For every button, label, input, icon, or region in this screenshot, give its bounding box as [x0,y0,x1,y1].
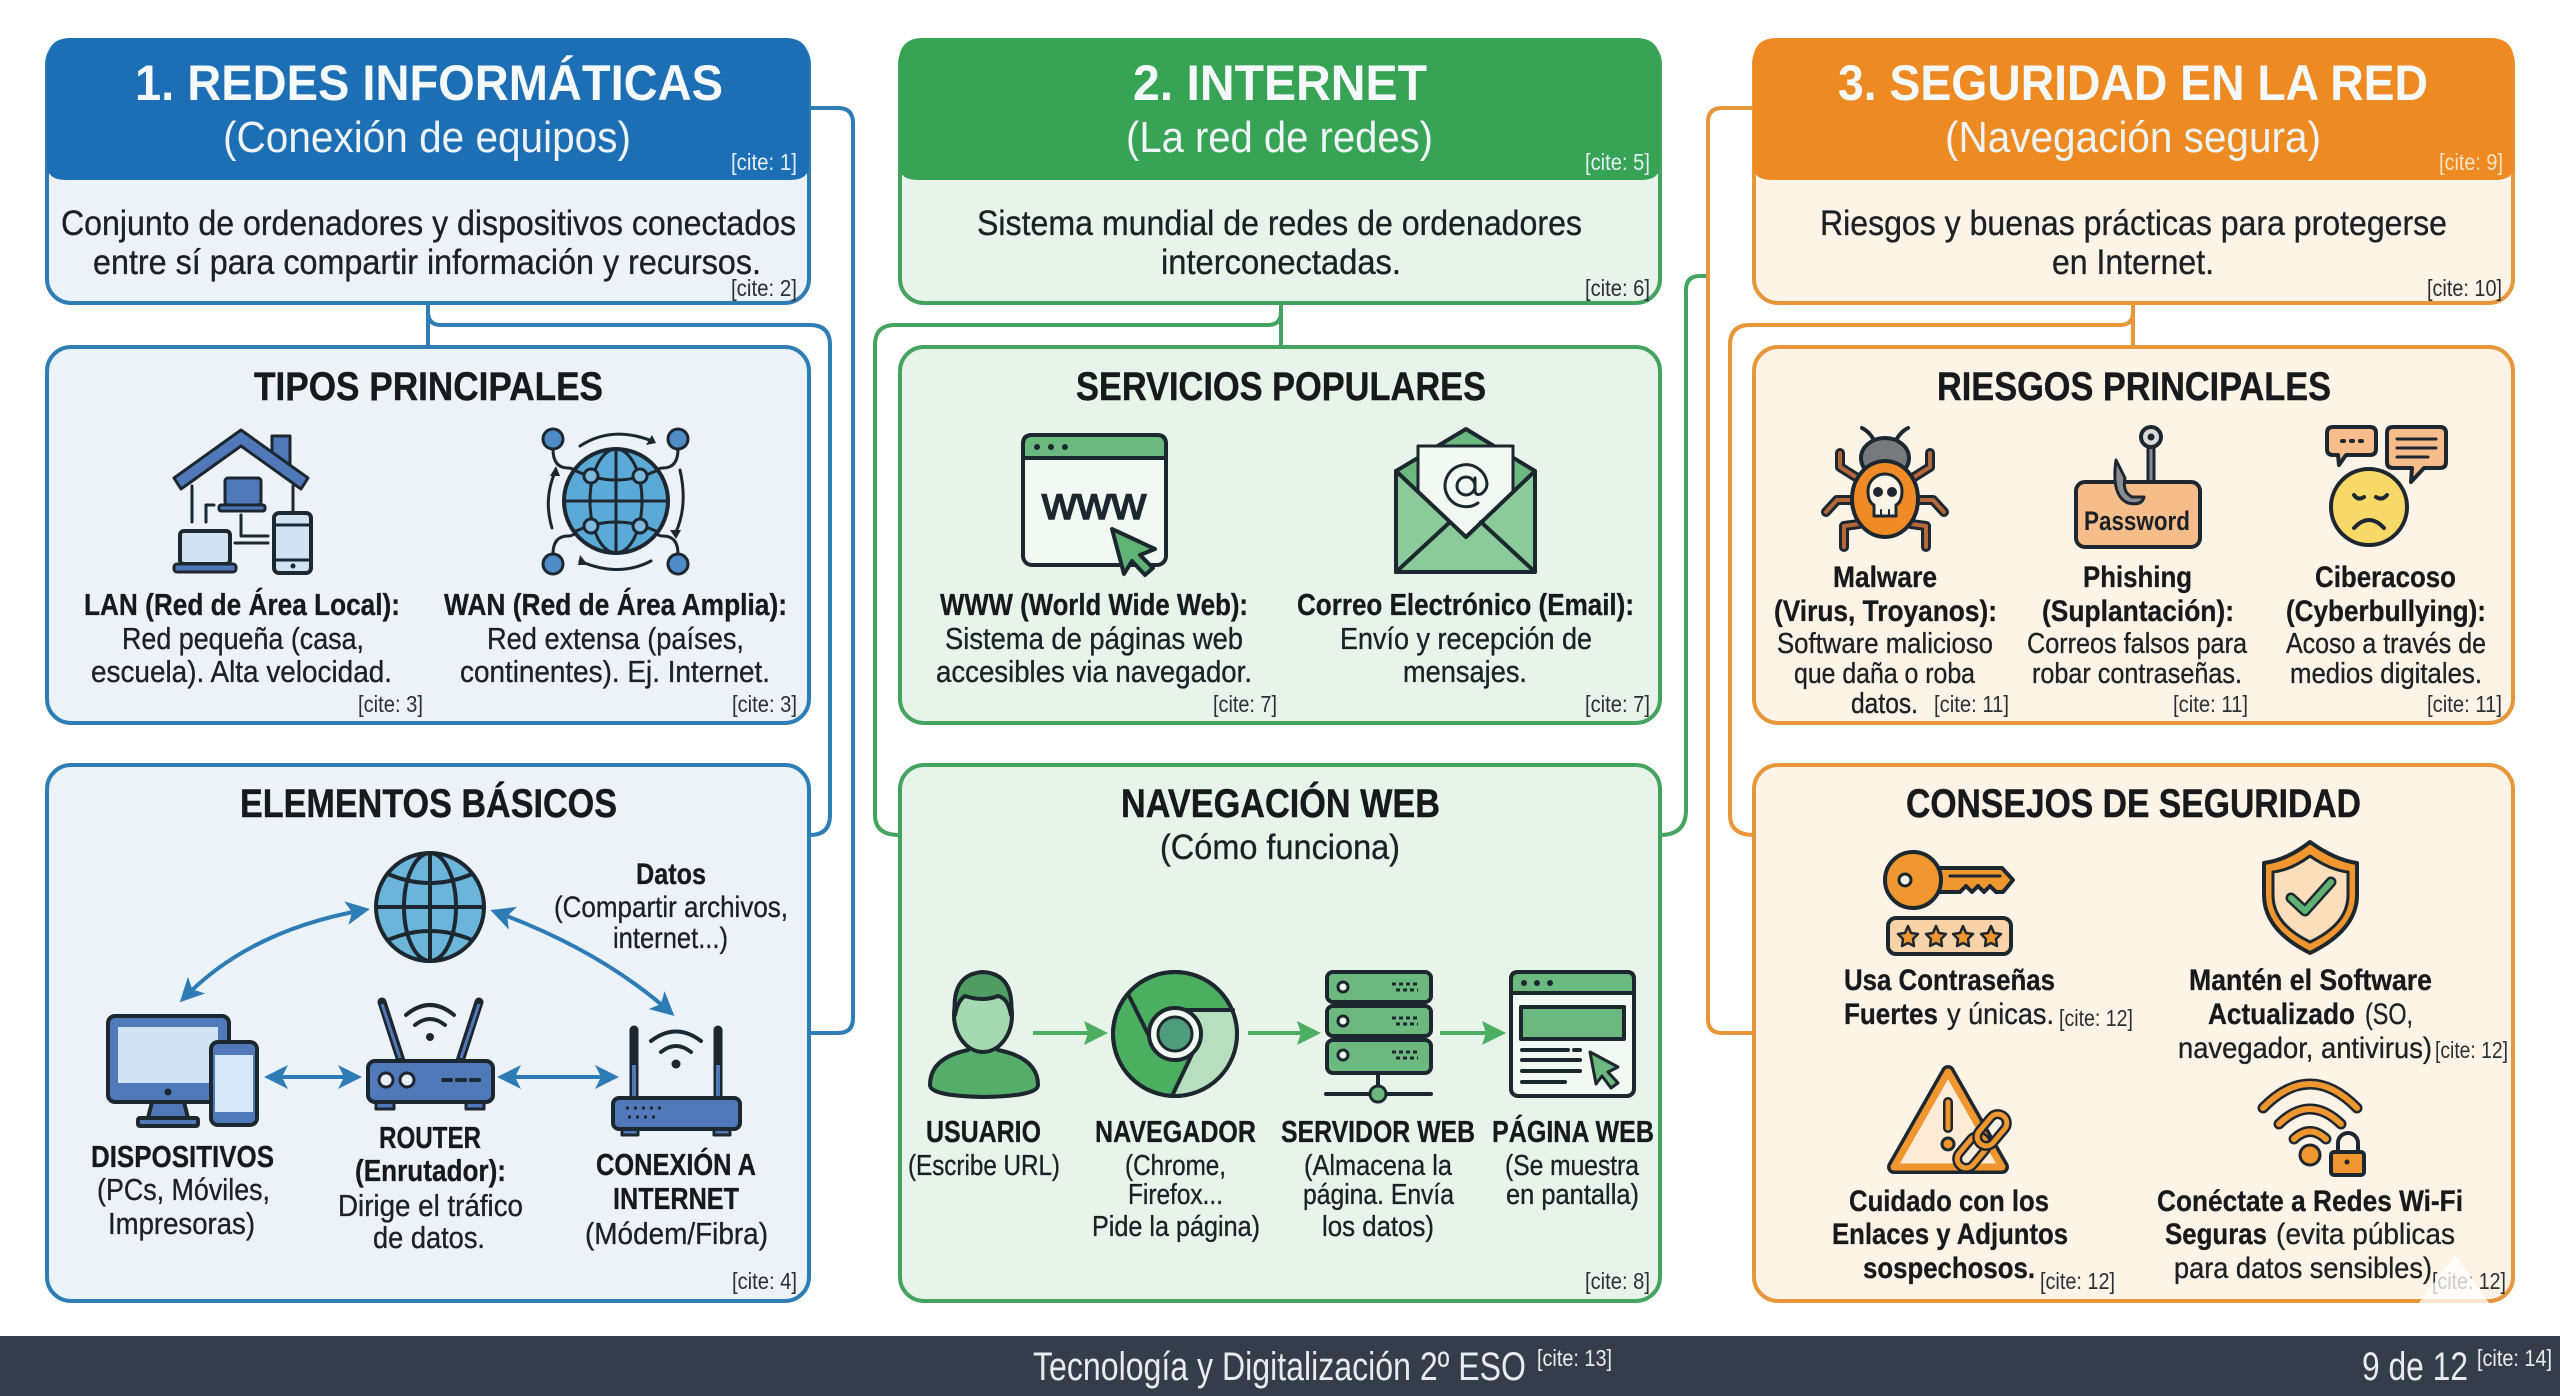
tip: software: [cite: 12] [2435,1037,2508,1063]
correo text: Correo Electrónico (Email): [1297,587,1634,622]
citation: [cite: 8] [1585,1268,1650,1294]
arrow: user to browser [1033,1031,1102,1035]
arrow: router to internet [503,1075,613,1079]
WAN text: Red extensa (países, [487,621,744,656]
citation: [cite: 5] [1585,149,1650,175]
description: Sistema mundial de redes de ordenadores [977,204,1582,243]
ciberacoso text: (Cyberbullying): [2286,595,2486,628]
heading: CONSEJOS DE SEGURIDAD [1906,782,2361,826]
tip: enlaces: sospechosos. [1863,1252,2035,1285]
servidor text: SERVIDOR WEB [1281,1114,1475,1149]
arrow: server to page [1440,1031,1500,1035]
router text: ROUTER [379,1120,481,1155]
icon: globe [376,853,484,961]
citation: [cite: 9] [2439,149,2503,175]
icon: house LAN [174,430,311,573]
servidor text: (Almacena la [1304,1150,1453,1182]
panel: elementos básicos [47,765,809,1301]
icon: router [368,1002,493,1109]
página text: en pantalla) [1506,1179,1639,1211]
icon: web page [1511,972,1634,1096]
heading: RIESGOS PRINCIPALES [1937,365,2331,409]
footer citation: [cite: 13] [1537,1345,1612,1371]
servidor text [1281,1114,1475,1243]
phishing text: [cite: 11] [2173,691,2248,717]
phishing text: Phishing [2083,561,2192,594]
description: [cite: 10] [2427,275,2502,301]
tip: wifi: Conéctate a Redes Wi-Fi [2157,1185,2463,1218]
phishing text: (Suplantación): [2042,595,2234,628]
tip: software: (SO, [2365,998,2413,1031]
navegador text [1092,1114,1260,1243]
ciberacoso text [2286,561,2502,717]
header card: redes informáticas [47,38,809,303]
conexión text: INTERNET [613,1181,739,1216]
navegador text: Firefox... [1128,1179,1223,1211]
subtitle: (Navegación segura) [1945,113,2321,162]
icon: globe WAN [543,429,688,574]
column 1: redes informáticas [47,38,809,1301]
www text: [cite: 7] [1213,691,1277,717]
subtitle: (La red de redes) [1126,113,1433,162]
panel: tipos principales [47,347,809,723]
conexión text: (Módem/Fibra) [585,1216,768,1251]
ciberacoso text: medios digitales. [2290,658,2482,690]
dispositivos text: DISPOSITIVOS [91,1139,274,1174]
watermark patch over last citation [2418,1255,2490,1304]
LAN text: Red pequeña (casa, [122,621,364,656]
connectors: orange [1708,108,2133,1033]
router text [338,1120,523,1255]
malware text: datos. [1851,688,1918,720]
icon: server [1326,972,1431,1102]
WAN text: continentes). Ej. Internet. [460,654,770,689]
icon: www window [1023,435,1166,575]
column 2: internet [899,38,1660,1301]
title: 2. INTERNET [1133,55,1427,111]
panel: consejos de seguridad [1754,765,2513,1301]
tip: software: navegador, antivirus) [2178,1032,2432,1065]
heading: TIPOS PRINCIPALES [254,365,603,409]
usuario text: USUARIO [926,1114,1041,1149]
phishing text [2027,561,2248,717]
icon: key and stars [1885,852,2013,954]
citation: [cite: 4] [732,1268,797,1294]
correo text: [cite: 7] [1585,691,1650,717]
router text: (Enrutador): [355,1153,506,1188]
página text: (Se muestra [1505,1150,1640,1182]
navegador text: NAVEGADOR [1095,1114,1256,1149]
tip: wifi: para datos sensibles) [2174,1252,2432,1285]
WAN text: WAN (Red de Área Amplia): [444,587,787,622]
tip: wifi: [cite: 12] [2432,1268,2506,1294]
subheading: (Cómo funciona) [1160,828,1400,867]
title: 1. REDES INFORMÁTICAS [135,55,723,111]
icon: shield [2264,842,2357,953]
subtitle: (Conexión de equipos) [223,113,631,162]
malware text: que daña o roba [1794,658,1976,690]
LAN text [84,587,423,717]
description: Conjunto de ordenadores y dispositivos conectados [61,204,796,243]
description: [cite: 2] [731,275,797,301]
ciberacoso text: Acoso a través de [2286,628,2486,660]
tip: contraseñas [1844,964,2133,1031]
tip: software [2178,964,2508,1065]
correo text: mensajes. [1403,654,1527,689]
page number: 9 de 12 [2362,1345,2468,1389]
password label: Password [2084,506,2190,536]
tip: enlaces: Enlaces y Adjuntos [1832,1218,2068,1251]
footer bar [0,1336,2560,1396]
description: entre sí para compartir información y recursos. [93,243,761,282]
icon: devices [108,1016,257,1126]
tip: enlaces: [cite: 12] [2040,1268,2115,1294]
dispositivos text: Impresoras) [108,1206,255,1241]
panel: riesgos principales [1754,347,2513,723]
malware text: Malware [1833,561,1937,594]
citation: [cite: 1] [731,149,797,175]
www text [936,587,1277,717]
data arrows to globe [184,910,670,1012]
navegador text: Pide la página) [1092,1211,1260,1243]
icon: browser [1113,972,1238,1096]
icon: wifi lock [2263,1084,2364,1175]
página text: PÁGINA WEB [1492,1114,1654,1149]
phishing text: Correos falsos para [2027,628,2248,660]
connectors: blue [428,108,853,1033]
usuario text [908,1114,1060,1182]
data label: internet...) [613,922,728,955]
tip: contraseñas: Fuertes [1844,998,1938,1031]
LAN text: LAN (Red de Área Local): [84,587,400,622]
WAN text [444,587,797,717]
tip: enlaces: Cuidado con los [1849,1185,2049,1218]
icon: cyberbullying face [2327,427,2446,545]
correo text: Envío y recepción de [1340,621,1592,656]
tip: software: Actualizado [2208,998,2355,1031]
data label [554,858,788,955]
icon: phishing hook [2076,427,2200,547]
malware text: Software malicioso [1777,628,1993,660]
correo text [1297,587,1650,717]
tip: wifi [2157,1185,2506,1294]
tip: contraseñas: Usa Contraseñas [1844,964,2055,997]
header card: internet [899,38,1660,303]
tip: software: Mantén el Software [2189,964,2432,997]
página text [1492,1114,1654,1211]
description: en Internet. [2052,243,2214,282]
www text: Sistema de páginas web [945,621,1243,656]
malware text [1774,561,2009,720]
data label: (Compartir archivos, [554,891,788,924]
description: [cite: 6] [1585,275,1650,301]
title: 3. SEGURIDAD EN LA RED [1838,55,2428,111]
dispositivos text: (PCs, Móviles, [97,1172,270,1207]
ciberacoso text: Ciberacoso [2315,561,2456,594]
LAN text: escuela). Alta velocidad. [91,654,392,689]
ciberacoso text: [cite: 11] [2427,691,2502,717]
www text: WWW (World Wide Web): [940,587,1248,622]
router text: Dirige el tráfico [338,1188,523,1223]
dispositivos text [91,1139,274,1241]
www text: accesibles via navegador. [936,654,1252,689]
column 3: seguridad [1753,38,2514,1301]
WAN text: [cite: 3] [732,691,797,717]
icon: envelope [1396,429,1535,572]
icon: user [930,972,1038,1097]
description [1820,204,2502,301]
description: Riesgos y buenas prácticas para protegerse [1820,204,2447,243]
header card: seguridad [1753,38,2514,303]
conexión text: CONEXIÓN A [596,1146,756,1182]
servidor text: página. Envía [1303,1179,1455,1211]
malware text: [cite: 11] [1934,691,2009,717]
heading: ELEMENTOS BÁSICOS [240,781,617,826]
icon: warning and chain [1894,1072,2010,1172]
heading: SERVICIOS POPULARES [1076,365,1486,409]
data label: Datos [636,858,706,891]
LAN text: [cite: 3] [358,691,423,717]
icon: www window: www [1041,477,1147,529]
description [61,204,797,301]
usuario text: (Escribe URL) [908,1150,1060,1182]
tip: enlaces [1832,1185,2115,1294]
tip: contraseñas: [cite: 12] [2059,1005,2133,1031]
arrow: browser to server [1248,1031,1315,1035]
footer title: Tecnología y Digitalización 2º ESO [1033,1345,1526,1389]
tip: contraseñas: y únicas. [1947,998,2054,1031]
tip: wifi: (evita públicas [2276,1218,2455,1251]
description [977,204,1650,301]
description: interconectadas. [1161,243,1401,282]
tip: wifi: Seguras [2165,1218,2267,1251]
panel: servicios populares [900,347,1660,723]
servidor text: los datos) [1322,1211,1434,1243]
malware text: (Virus, Troyanos): [1774,595,1997,628]
connectors: green [875,276,1707,835]
icon: modem [613,1030,740,1135]
panel: navegación web [900,765,1660,1301]
heading: NAVEGACIÓN WEB [1121,780,1440,826]
arrow: devices to router [270,1075,356,1079]
conexión text [585,1146,768,1251]
icon: malware bug [1826,428,1944,547]
router text: de datos. [373,1220,485,1255]
phishing text: robar contraseñas. [2032,658,2242,690]
navegador text: (Chrome, [1125,1150,1226,1182]
